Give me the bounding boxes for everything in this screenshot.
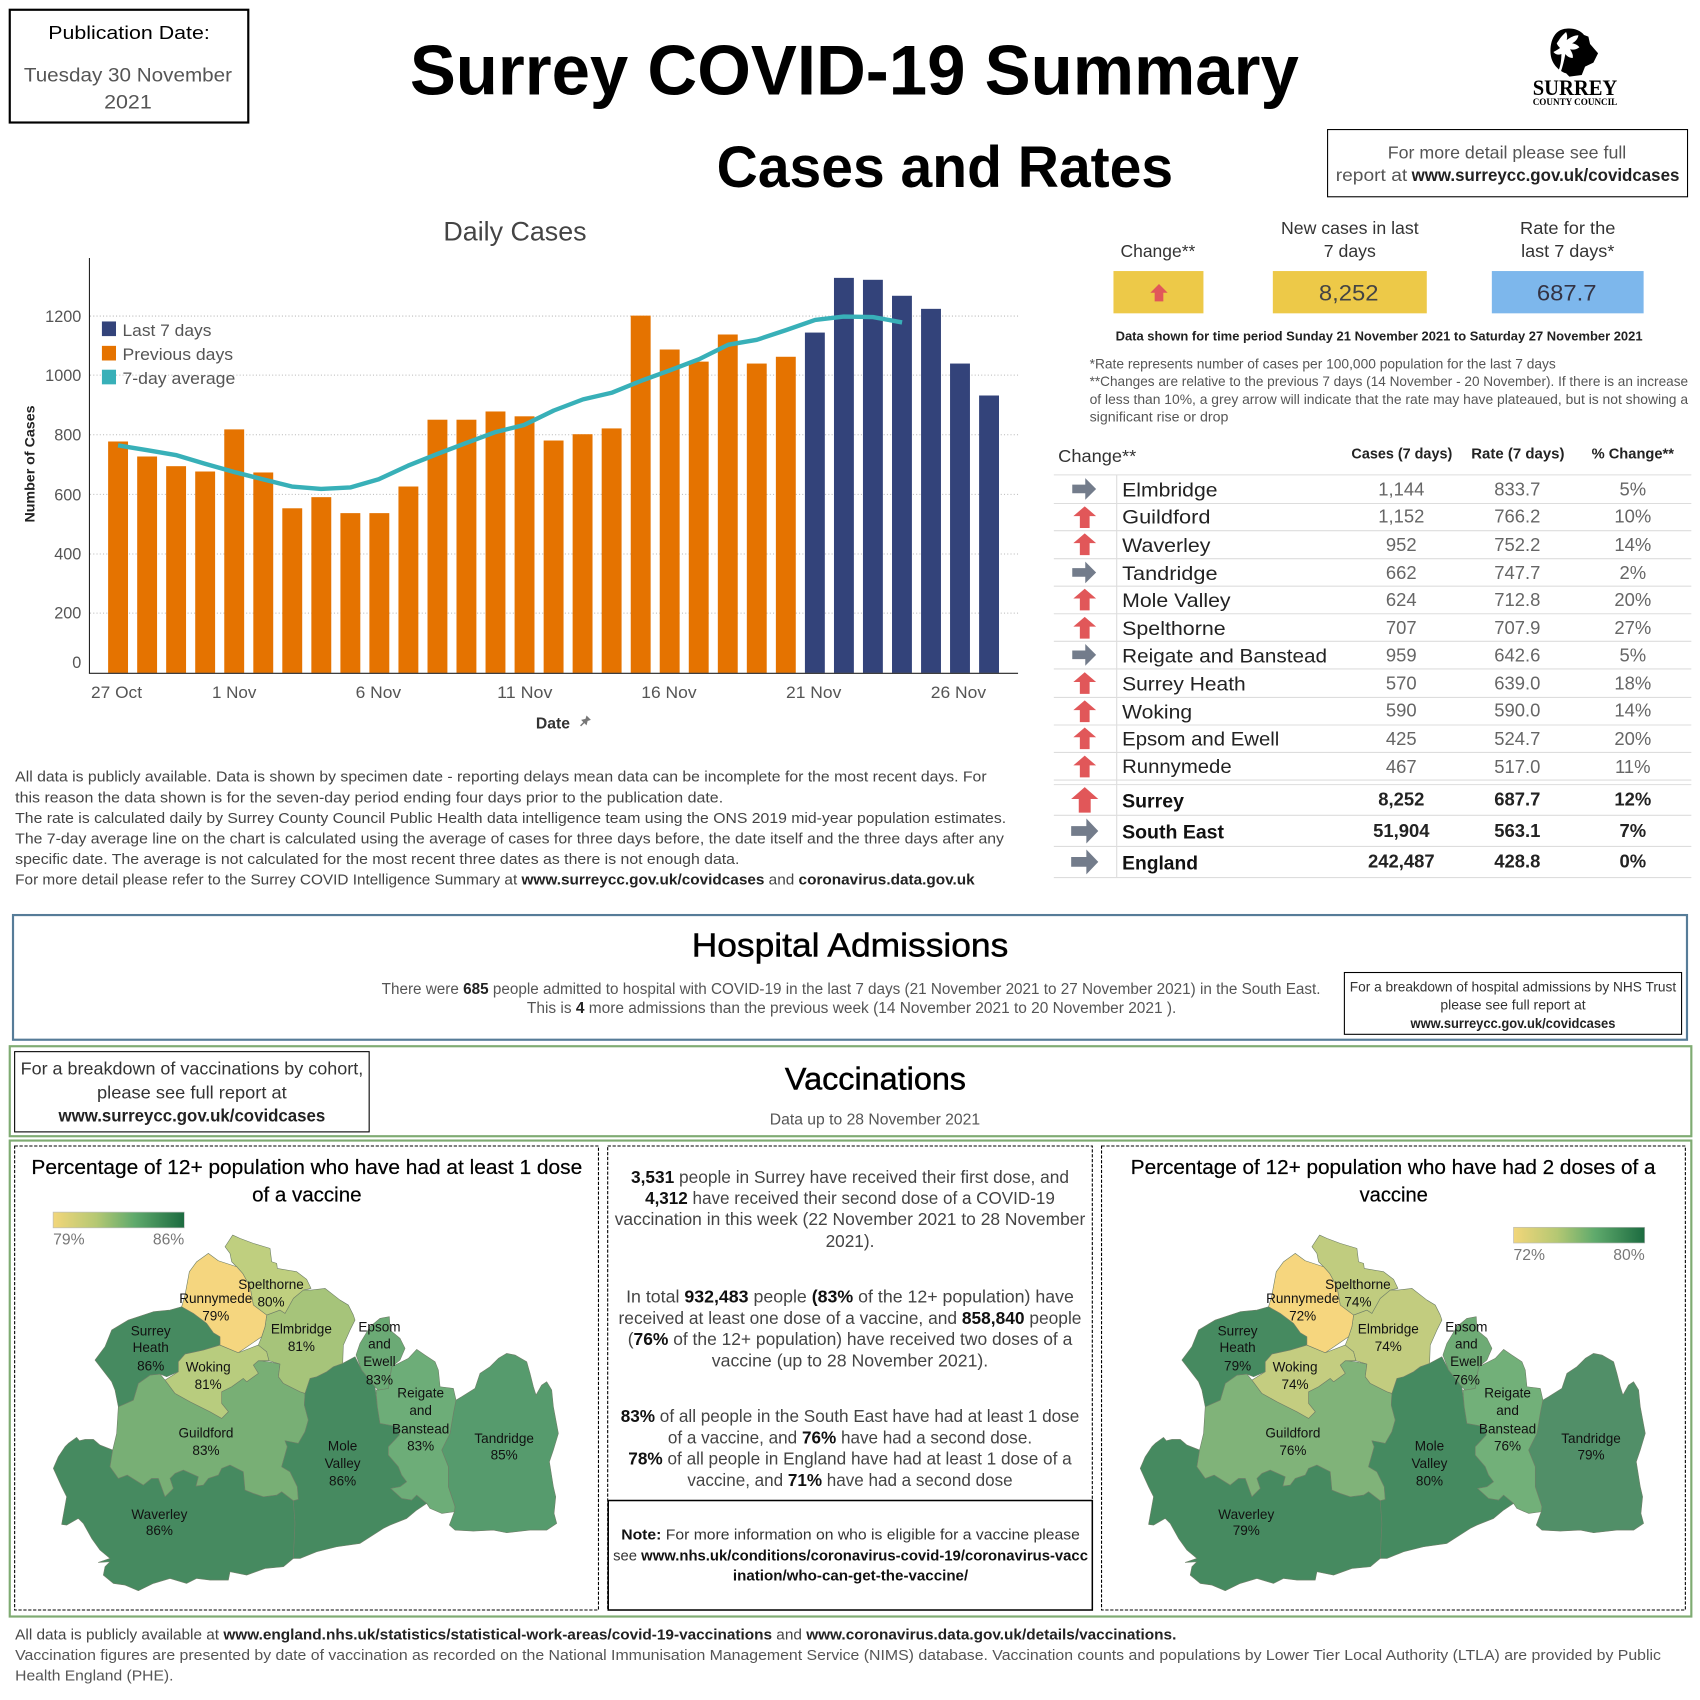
map labels: first dose: Tandridge <box>474 1431 534 1446</box>
row: Runnymede: 517.0 <box>1494 756 1540 777</box>
row: Surrey Heath: Surrey Heath <box>1122 675 1246 696</box>
footer: data sources: All data is publicly available at www.england.nhs.uk/statistics/statistical-work-areas/covid-19-vaccinations and www.coronavirus.data.gov.uk/details/vaccinations. <box>15 1626 1176 1643</box>
row: Reigate and Banstead: 642.6 <box>1494 644 1540 665</box>
map labels: first dose: 83% <box>192 1443 220 1458</box>
map labels: second dose: Mole <box>1415 1439 1444 1454</box>
x axis title <box>536 716 591 733</box>
map labels: first dose <box>131 1277 534 1538</box>
y axis labels: 800 <box>54 427 81 445</box>
chart notes text block: specific date. The average is not calculated for the most recent three dates as there is not enough data. <box>15 851 739 868</box>
row: Spelthorne <box>1073 617 1651 640</box>
paragraph: total doses: vaccine (up to 28 November 2021). <box>712 1351 988 1371</box>
row: Surrey: 12% <box>1614 789 1651 810</box>
x axis labels: 11 Nov <box>497 684 553 702</box>
chart notes text block: The 7-day average line on the chart is calculated using the average of cases for three days before, the date itself and the three days after any <box>15 830 1004 847</box>
map labels: first dose: Runnymede <box>179 1291 252 1306</box>
panel: vaccination summary text <box>608 1146 1092 1610</box>
map labels: second dose: Woking <box>1273 1359 1318 1374</box>
callout: NHS trust breakdown: www.surreycc.gov.uk/covidcases <box>1410 1016 1615 1031</box>
map heading: Percentage of 12+ population who have had 2 doses of a <box>1131 1156 1656 1179</box>
map labels: first dose: 81% <box>288 1339 315 1354</box>
row: England <box>1071 849 1646 875</box>
row: Guildford: 766.2 <box>1494 506 1540 527</box>
x axis labels: 6 Nov <box>356 684 402 702</box>
x axis labels: 27 Oct <box>91 684 143 702</box>
y axis title: Number of Cases <box>23 405 38 523</box>
row: Waverley: 752.2 <box>1494 534 1540 555</box>
table header: % Change** <box>1592 447 1674 463</box>
map heading: vaccine <box>1360 1183 1428 1206</box>
paragraph: total doses: received at least one dose of a vaccine, and 858,840 people <box>619 1308 1081 1328</box>
map heading: Percentage of 12+ population who have had at least 1 dose <box>31 1156 582 1179</box>
note: vaccine eligibility: see www.nhs.uk/conditions/coronavirus-covid-19/coronavirus-vacc <box>613 1548 1088 1565</box>
row: Elmbridge: 5% <box>1619 478 1646 499</box>
publication date box: Tuesday 30 November <box>24 65 232 86</box>
row: Elmbridge: 833.7 <box>1494 478 1540 499</box>
map labels: first dose: Elmbridge <box>271 1322 332 1337</box>
y axis labels: 0 <box>72 654 81 672</box>
row: Runnymede: 11% <box>1615 756 1651 777</box>
map labels: second dose: 80% <box>1416 1473 1443 1488</box>
map legend <box>53 1212 184 1249</box>
line: 7-day average <box>118 317 902 489</box>
map heading <box>1131 1156 1656 1206</box>
row: Tandridge: 662 <box>1386 562 1417 583</box>
map labels: first dose: Spelthorne <box>238 1277 304 1292</box>
row: Surrey Heath <box>1073 672 1651 696</box>
y axis labels: 1000 <box>45 367 81 385</box>
map labels: second dose: and <box>1455 1337 1478 1352</box>
map labels: first dose: 86% <box>329 1473 356 1488</box>
x axis labels <box>91 684 987 702</box>
row: Epsom and Ewell <box>1073 727 1651 750</box>
row: South East: 7% <box>1619 820 1646 841</box>
table header: Cases (7 days) <box>1351 447 1452 463</box>
map labels: second dose: 76% <box>1279 1443 1306 1458</box>
map legend: 86% <box>153 1232 184 1249</box>
paragraph: weekly doses: 2021). <box>826 1231 874 1251</box>
map labels: first dose: Epsom <box>358 1319 401 1334</box>
callout: cohort breakdown <box>15 1052 369 1132</box>
row: Runnymede: 467 <box>1386 756 1417 777</box>
map labels: first dose: 79% <box>202 1309 229 1324</box>
rate definition notes: **Changes are relative to the previous 7 days (14 November - 20 November). If there is an increase <box>1090 374 1688 389</box>
logo: Surrey County Council: COUNTY COUNCIL <box>1533 97 1617 107</box>
publication date box: Publication Date: <box>48 22 210 43</box>
rate definition notes: significant rise or drop <box>1090 410 1228 425</box>
row: Guildford <box>1073 506 1651 529</box>
map labels: second dose: 74% <box>1375 1339 1402 1354</box>
callout: cohort breakdown: www.surreycc.gov.uk/covidcases <box>58 1106 325 1126</box>
KPI: change: Change** <box>1121 241 1196 261</box>
map labels: second dose: and <box>1496 1403 1519 1418</box>
map labels: first dose: and <box>368 1337 391 1352</box>
row: Epsom and Ewell: 20% <box>1614 728 1651 749</box>
row: Mole Valley: 712.8 <box>1494 589 1540 610</box>
map labels: first dose: Waverley <box>131 1507 188 1522</box>
legend: Last 7 days <box>123 322 211 340</box>
row: England: 242,487 <box>1368 850 1435 871</box>
paragraph: weekly doses: 3,531 people in Surrey have received their first dose, and <box>631 1167 1069 1187</box>
KPI: rate: Rate for the <box>1520 218 1615 238</box>
map labels: second dose: Banstead <box>1479 1421 1536 1436</box>
row: Spelthorne: 707.9 <box>1494 617 1540 638</box>
KPI: change <box>1113 241 1203 313</box>
chart notes text block <box>15 769 1006 889</box>
x axis labels: 16 Nov <box>641 684 698 702</box>
row: Tandridge: 2% <box>1619 562 1646 583</box>
KPI: rate: 687.7 <box>1537 280 1596 305</box>
paragraph: regional comparison: of a vaccine, and 76% have had a second dose. <box>668 1428 1032 1448</box>
map labels: first dose: 85% <box>491 1447 518 1462</box>
callout: full report link: For more detail please see full <box>1388 142 1626 162</box>
callout: NHS trust breakdown <box>1344 973 1682 1034</box>
KPI: rate: last 7 days* <box>1521 241 1615 261</box>
map labels: second dose: Tandridge <box>1561 1431 1621 1446</box>
rate definition notes: *Rate represents number of cases per 100,000 population for the last 7 days <box>1090 357 1556 372</box>
admissions text: This is 4 more admissions than the previous week (14 November 2021 to 20 November 2021 ). <box>527 1000 1176 1017</box>
row: Epsom and Ewell: 425 <box>1386 728 1417 749</box>
row: Woking <box>1073 700 1651 723</box>
row: Waverley <box>1073 533 1651 557</box>
row: Mole Valley: Mole Valley <box>1122 591 1231 612</box>
map labels: first dose: Reigate <box>397 1386 444 1401</box>
map labels: second dose: Runnymede <box>1266 1291 1339 1306</box>
map labels: second dose: Ewell <box>1450 1354 1483 1369</box>
map labels: second dose: Heath <box>1220 1340 1256 1355</box>
footer: data sources: Health England (PHE). <box>15 1667 173 1684</box>
y axis labels: 400 <box>54 545 81 563</box>
map labels: second dose: 74% <box>1281 1377 1309 1392</box>
row: Surrey Heath: 639.0 <box>1494 673 1540 694</box>
paragraph: total doses: In total 932,483 people (83% of the 12+ population) have <box>626 1287 1074 1307</box>
map labels: first dose: Ewell <box>363 1354 396 1369</box>
row: South East: 563.1 <box>1494 820 1540 841</box>
row: Reigate and Banstead: Reigate and Banstead <box>1122 646 1327 667</box>
row: England: England <box>1122 854 1198 875</box>
x axis labels: 1 Nov <box>212 684 257 702</box>
row: Epsom and Ewell: Epsom and Ewell <box>1122 729 1279 750</box>
table header: Change** <box>1058 446 1136 466</box>
legend <box>102 321 235 388</box>
logo: Surrey County Council: SURREY <box>1533 76 1618 100</box>
x axis labels: 21 Nov <box>786 684 842 702</box>
row: Surrey <box>1071 787 1651 813</box>
time period text: Data shown for time period Sunday 21 November 2021 to Saturday 27 November 2021 <box>1116 328 1643 343</box>
legend: Previous days <box>123 346 233 364</box>
row: Reigate and Banstead <box>1072 644 1646 667</box>
row: Tandridge: 747.7 <box>1494 562 1540 583</box>
KPI: new cases: 7 days <box>1324 241 1376 261</box>
map labels: first dose: 86% <box>146 1523 173 1538</box>
row: Spelthorne: 27% <box>1614 617 1651 638</box>
paragraph: weekly doses: 4,312 have received their second dose of a COVID-19 <box>645 1188 1055 1208</box>
row: Surrey: Surrey <box>1122 792 1184 813</box>
row: Surrey Heath: 18% <box>1614 673 1651 694</box>
callout: full report link: www.surreycc.gov.uk/covidcases <box>1411 165 1679 185</box>
paragraph: regional comparison: 83% of all people in the South East have had at least 1 dose <box>621 1406 1079 1426</box>
row: Surrey: 687.7 <box>1494 789 1540 810</box>
note: vaccine eligibility: Note: For more information on who is eligible for a vaccine please <box>621 1527 1080 1544</box>
admissions text <box>382 981 1321 1017</box>
legend: 7-day average <box>123 370 235 388</box>
y axis labels: 200 <box>54 605 81 623</box>
map labels: second dose: 72% <box>1289 1309 1316 1324</box>
rate definition notes <box>1090 357 1689 425</box>
row: Elmbridge <box>1072 478 1646 502</box>
map labels: first dose: Mole <box>328 1439 357 1454</box>
map labels: second dose: 76% <box>1453 1373 1480 1388</box>
chart notes text block: All data is publicly available. Data is shown by specimen date - reporting delays mean data can be incomplete for the most recent days. For <box>15 769 987 786</box>
panel: second dose map <box>1102 1146 1685 1610</box>
vaccination data date: Data up to 28 November 2021 <box>770 1111 980 1128</box>
map labels: first dose: Guildford <box>179 1426 233 1441</box>
map labels: first dose: 86% <box>137 1358 164 1373</box>
row: Reigate and Banstead: 959 <box>1386 644 1417 665</box>
row: Surrey Heath: 570 <box>1386 673 1417 694</box>
callout: NHS trust breakdown: please see full report at <box>1440 997 1586 1012</box>
paragraph: regional comparison: 78% of all people in England have had at least 1 dose of a <box>628 1449 1072 1469</box>
callout: full report link <box>1328 130 1688 197</box>
admissions text: There were 685 people admitted to hospital with COVID-19 in the last 7 days (21 November 2021 to 27 November 2021) in the South East. <box>382 981 1321 998</box>
map labels: second dose: 79% <box>1577 1447 1605 1462</box>
rate definition notes: of less than 10%, a grey arrow will indicate that the rate may have plateaued, but is not showing a <box>1090 392 1689 407</box>
row: Tandridge <box>1072 562 1646 585</box>
paragraph: regional comparison <box>621 1406 1079 1490</box>
callout: cohort breakdown: For a breakdown of vaccinations by cohort, <box>21 1058 363 1078</box>
panel: first dose map <box>15 1146 598 1610</box>
panel: vaccinations header <box>10 1046 1691 1136</box>
title: Surrey COVID-19 Summary <box>410 30 1299 109</box>
map heading: of a vaccine <box>252 1183 362 1206</box>
row: Mole Valley <box>1073 589 1651 612</box>
map labels: first dose: Banstead <box>392 1421 449 1436</box>
map legend: 72% <box>1514 1247 1545 1264</box>
row: Elmbridge: 1,144 <box>1378 478 1424 499</box>
chart heading: Daily Cases <box>443 216 587 247</box>
map heading <box>31 1156 582 1206</box>
table header: Rate (7 days) <box>1471 447 1565 463</box>
bar chart: daily cases <box>23 258 1018 733</box>
paragraph: total doses: (76% of the 12+ population) have received two doses of a <box>628 1329 1073 1349</box>
map labels: first dose: 81% <box>195 1377 222 1392</box>
row: Guildford: 10% <box>1614 506 1651 527</box>
paragraph: total doses <box>619 1287 1081 1371</box>
paragraph: weekly doses <box>615 1167 1085 1251</box>
row: Spelthorne: 707 <box>1386 617 1417 638</box>
map labels: second dose <box>1218 1277 1621 1538</box>
row: Guildford: 1,152 <box>1378 506 1424 527</box>
map labels: first dose: Woking <box>186 1359 231 1374</box>
row: Woking: 590.0 <box>1494 700 1540 721</box>
footer: data sources: Vaccination figures are presented by date of vaccination as recorded on the National Immunisation Management Service (NIMS) database. Vaccination counts and populations by Lower Tier Local Authority (LTLA) are provided by Public <box>15 1647 1661 1664</box>
row: Guildford: Guildford <box>1122 508 1210 529</box>
y axis labels: 600 <box>54 486 81 504</box>
choropleth map: second dose <box>1140 1235 1645 1591</box>
row: Runnymede: Runnymede <box>1122 757 1232 778</box>
KPI: rate <box>1492 218 1644 313</box>
panel: hospital admissions <box>13 915 1687 1040</box>
map labels: second dose: Epsom <box>1445 1319 1487 1334</box>
chart notes text block: The rate is calculated daily by Surrey County Council Public Health data intelligence team using the ONS 2019 mid-year population estimates. <box>15 810 1006 827</box>
publication date box <box>10 10 248 123</box>
map labels: second dose: 76% <box>1494 1439 1521 1454</box>
map legend: 79% <box>53 1232 85 1249</box>
row: South East: South East <box>1122 823 1225 844</box>
map labels: first dose: Heath <box>133 1340 169 1355</box>
map labels: second dose: Spelthorne <box>1325 1277 1391 1292</box>
table: district cases and rates <box>1054 446 1691 878</box>
map labels: first dose: and <box>409 1403 432 1418</box>
x axis labels: 26 Nov <box>931 684 987 702</box>
KPI: new cases <box>1273 218 1427 313</box>
row: Waverley: 952 <box>1386 534 1417 555</box>
map labels: second dose: 79% <box>1224 1358 1251 1373</box>
logo: Surrey County Council <box>1533 28 1618 107</box>
row: Woking: 590 <box>1386 700 1417 721</box>
footer: data sources <box>15 1626 1661 1684</box>
map labels: second dose: 79% <box>1233 1523 1260 1538</box>
row: Epsom and Ewell: 524.7 <box>1494 728 1540 749</box>
row: Elmbridge: Elmbridge <box>1122 481 1218 502</box>
row: Mole Valley: 20% <box>1614 589 1651 610</box>
map labels: first dose: 83% <box>366 1373 393 1388</box>
map labels: second dose: Valley <box>1412 1456 1448 1471</box>
map labels: first dose: Surrey <box>131 1324 171 1339</box>
row: Woking: Woking <box>1122 702 1192 723</box>
row: England: 0% <box>1619 850 1646 871</box>
row: South East <box>1071 819 1646 844</box>
map labels: second dose: Elmbridge <box>1358 1322 1419 1337</box>
x axis title: Date <box>536 716 570 733</box>
map labels: second dose: Waverley <box>1218 1507 1274 1522</box>
row: Runnymede <box>1073 756 1651 778</box>
row: Tandridge: Tandridge <box>1122 564 1218 585</box>
row: England: 428.8 <box>1494 850 1540 871</box>
note: vaccine eligibility <box>608 1501 1092 1610</box>
map legend: 80% <box>1613 1247 1645 1264</box>
y axis labels <box>45 308 81 672</box>
row: Waverley: Waverley <box>1122 536 1211 557</box>
row: Surrey: 8,252 <box>1378 789 1424 810</box>
publication date box: 2021 <box>104 92 152 113</box>
callout: NHS trust breakdown: For a breakdown of hospital admissions by NHS Trust <box>1350 979 1676 994</box>
chart notes text block: For more detail please refer to the Surrey COVID Intelligence Summary at www.surreycc.gov.uk/covidcases and coronavirus.data.gov.uk <box>15 872 975 889</box>
row: Mole Valley: 624 <box>1386 589 1417 610</box>
KPI: new cases: 8,252 <box>1319 280 1379 305</box>
panel: vaccinations content frame <box>10 1141 1691 1617</box>
heading: vaccinations: Vaccinations <box>785 1062 966 1097</box>
map labels: first dose: 80% <box>257 1294 285 1309</box>
map legend <box>1514 1227 1645 1264</box>
y axis labels: 1200 <box>45 308 81 326</box>
bars: previous days <box>108 316 796 673</box>
map labels: second dose: Guildford <box>1265 1426 1320 1441</box>
section heading: cases and rates: Cases and Rates <box>717 135 1173 200</box>
paragraph: regional comparison: vaccine, and 71% have had a second dose <box>687 1470 1013 1490</box>
callout: full report link: report at <box>1336 165 1407 185</box>
row: Woking: 14% <box>1614 700 1651 721</box>
map labels: second dose: Reigate <box>1484 1386 1531 1401</box>
paragraph: weekly doses: vaccination in this week (22 November 2021 to 28 November <box>615 1209 1085 1229</box>
KPI: new cases: New cases in last <box>1281 218 1419 238</box>
chart notes text block: this reason the data shown is for the seven-day period ending four days prior to the publication date. <box>15 789 723 806</box>
note: vaccine eligibility: ination/who-can-get-the-vaccine/ <box>733 1568 969 1585</box>
table header <box>1058 446 1674 466</box>
map labels: second dose: Surrey <box>1218 1324 1258 1339</box>
map labels: second dose: 74% <box>1344 1294 1372 1309</box>
map labels: first dose: Valley <box>325 1456 361 1471</box>
row: South East: 51,904 <box>1373 820 1430 841</box>
heading: hospital admissions: Hospital Admissions <box>692 927 1008 964</box>
choropleth map: first dose <box>53 1235 558 1591</box>
row: Spelthorne: Spelthorne <box>1122 619 1226 640</box>
bars: last 7 days <box>805 278 999 673</box>
row: Waverley: 14% <box>1614 534 1651 555</box>
callout: cohort breakdown: please see full report at <box>97 1082 287 1102</box>
map labels: first dose: 83% <box>407 1439 434 1454</box>
row: Reigate and Banstead: 5% <box>1619 644 1646 665</box>
